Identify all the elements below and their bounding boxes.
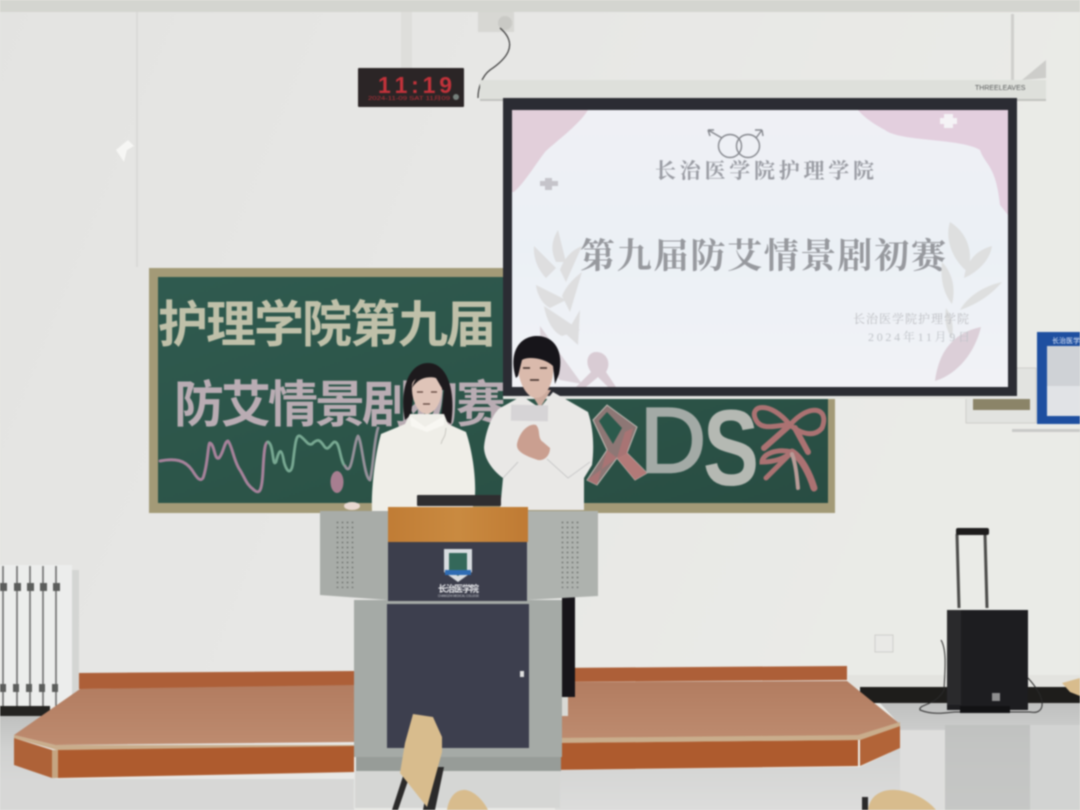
- woman hair: [403, 363, 452, 424]
- blackboard: [149, 268, 835, 513]
- slide date: 2024年11月9日: [868, 329, 970, 344]
- chalk letters DS: S: [703, 387, 759, 508]
- woman shirt: [372, 414, 475, 512]
- woman presenter: [344, 363, 475, 512]
- college name on lectern: 长治医学院: [438, 583, 479, 594]
- blackboard heading line 2: 防艾情景剧初赛: [174, 377, 506, 433]
- man presenter: [484, 336, 593, 510]
- chair back right: [862, 790, 936, 810]
- projector screen housing: THREELEAVES: [975, 85, 1026, 92]
- ceiling cable and fixture: [478, 12, 514, 98]
- slide pink corner top right: [858, 110, 1008, 215]
- man pants: [562, 597, 575, 697]
- white crosses: [540, 114, 957, 190]
- chair back second: [447, 790, 488, 810]
- chalk letters DS: D: [640, 390, 706, 492]
- digital wall clock: 1 1 : 1 9: [378, 72, 452, 98]
- small object on wall: [116, 140, 134, 162]
- heartbeat chalk line: [160, 428, 378, 492]
- chair back centre: [392, 714, 444, 810]
- slide pink corner top left: [512, 110, 588, 192]
- lectern: [320, 495, 598, 808]
- college crest: [444, 549, 472, 582]
- radiator: [0, 565, 79, 707]
- power cable: [920, 640, 1042, 713]
- slide organiser text: 长治医学院护理学院: [853, 311, 969, 326]
- chalk AIDS ribbon: [587, 405, 647, 485]
- slide college name: 长治医学院护理学院: [655, 159, 874, 183]
- digital wall clock: 2024-11-09 SAT 11月09: [368, 96, 450, 102]
- man neck: [529, 390, 551, 408]
- lectern fascia: [388, 542, 527, 601]
- trolley speaker: [947, 528, 1028, 713]
- laptop on lectern: [417, 495, 501, 506]
- paper card: [511, 405, 548, 421]
- lectern base: [354, 600, 562, 757]
- digital wall clock: [358, 68, 464, 107]
- lectern right wing: [527, 511, 598, 600]
- lectern wood top: [388, 507, 528, 542]
- box and shelf behind screen: [966, 368, 1080, 432]
- slide main title: 第九届防艾情景剧初赛: [580, 237, 949, 276]
- woman eyes and mouth: [417, 392, 437, 404]
- slide leaves left: [534, 230, 582, 384]
- lectern left wing: [320, 511, 388, 600]
- lectern: CHANGZHI MEDICAL COLLEGE: [438, 594, 479, 598]
- man eyes and mouth: [523, 368, 547, 380]
- projector screen: [503, 98, 1030, 399]
- man face: [518, 354, 553, 398]
- skirting and floor: [0, 675, 1080, 810]
- blackboard heading line 1: 护理学院第九届: [158, 297, 496, 353]
- man hands: [517, 425, 550, 460]
- slide leaves right: [935, 222, 1002, 381]
- wall socket: [875, 635, 893, 652]
- stage platform: [14, 666, 900, 778]
- man shoe: [561, 697, 568, 716]
- projector screen housing: [480, 60, 1046, 101]
- wall notice poster: [1037, 332, 1080, 424]
- slide pink ribbon: [576, 352, 616, 387]
- chalk bow: [754, 408, 824, 488]
- table corner right: [1062, 678, 1080, 696]
- woman face: [412, 376, 442, 414]
- speaker handle: [957, 534, 987, 608]
- man hair: [513, 336, 560, 384]
- man shirt: [484, 392, 593, 510]
- lectern door panel: [387, 604, 529, 748]
- chalk heart dot: [330, 471, 344, 493]
- wall notice poster: 长治医学: [1052, 336, 1080, 345]
- slide gender rings logo: [708, 130, 763, 158]
- chalk letters DS: [640, 387, 759, 508]
- lectern plinth: [356, 757, 561, 771]
